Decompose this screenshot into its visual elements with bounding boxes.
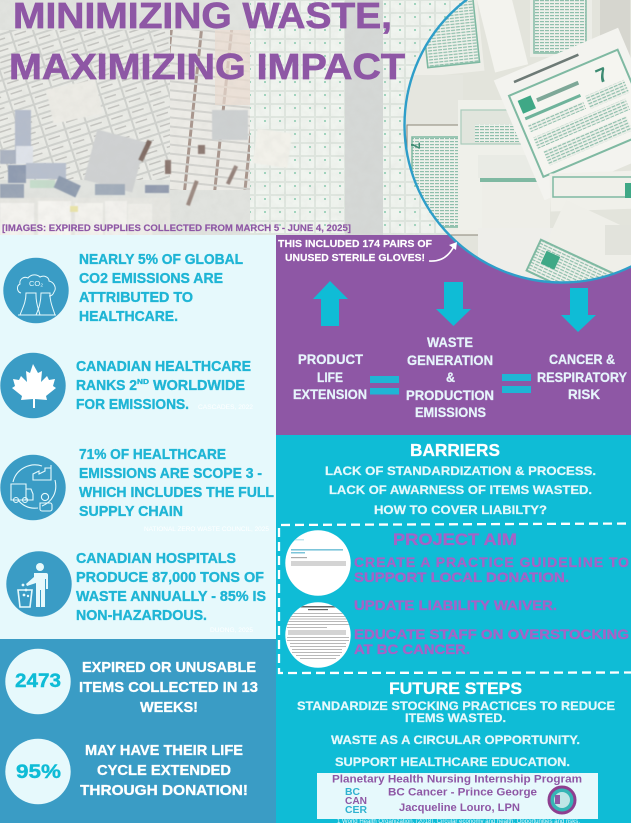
statistic text: CO2 EMISSIONS ARE [79,271,223,287]
list: future steps: WASTE AS A CIRCULAR OPPORTUNITY. [331,733,580,747]
equals sign: right [502,374,531,393]
list: future steps: STANDARDIZE STOCKING PRACTICES TO REDUCE [297,699,615,713]
stat: Canadian ranking [0,353,254,418]
statistic text: EMISSIONS ARE SCOPE 3 - [79,466,262,482]
document thumbnail: liability waiver [285,602,351,668]
statistic text [79,447,274,520]
logo: BC Cancer [345,787,368,816]
stat: scope 3 emissions [0,447,274,533]
label: waste generation and production emissions [406,335,494,420]
number badge [5,739,71,804]
number badge: 95% [16,762,61,783]
label: product life extension: PRODUCT [298,352,364,367]
list: barriers: LACK OF AWARNESS OF ITEMS WASTED. [329,483,592,497]
photo circle: unused sterile gloves: 7 [408,142,423,149]
image caption: [IMAGES: EXPIRED SUPPLIES COLLECTED FROM MARCH 5 - JUNE 4, 2025] [2,222,351,233]
list: project aims: AT BC CANCER. [354,641,470,657]
citation: CASCADES, 2022 [198,405,254,411]
citation: DUONG, 2025 [210,628,254,634]
description: ITEMS COLLECTED IN 13 [79,680,258,696]
citation: NATIONAL ZERO WASTE COUNCIL, 2025 [144,527,270,533]
label: waste generation and production emissions: GENERATION [407,353,493,368]
statistic text: ATTRIBUTED TO [79,290,193,306]
list: barriers [325,464,596,517]
logo: BC Cancer: CAN [345,796,367,807]
statistic text: CANADIAN HEALTHCARE [76,359,251,375]
heading: barriers: BARRIERS [410,440,500,460]
statistic text: RANKS 2 [76,378,137,394]
statistic text: SUPPLY CHAIN [79,504,183,520]
panel: totals (blue) [0,639,276,823]
statistic text: WORLDWIDE [153,378,245,394]
statistic text: ND [137,377,150,386]
callout: sterile gloves: UNUSED STERILE GLOVES! [285,252,425,264]
hero photo: expired supplies [0,0,464,235]
icon: cooling towers with CO2 cloud [3,258,69,323]
icon: maple leaf [0,353,66,418]
list: future steps: SUPPORT HEALTHCARE EDUCATION. [335,755,570,769]
document thumbnail: practice guideline [285,530,351,596]
brown striped syringes [138,140,152,162]
stat: hospital waste [6,551,266,634]
description: CYCLE EXTENDED [97,763,231,779]
white packets bottom [0,198,170,236]
description: WEEKS! [140,700,198,716]
statistic text: WASTE ANNUALLY - 85% IS [76,589,266,605]
statistic text: CANADIAN HOSPITALS [76,551,236,567]
callout: sterile gloves [278,238,433,264]
panel: teal barriers, aim and next steps [276,435,631,823]
list: barriers: HOW TO COVER LIABILTY? [374,503,547,517]
description [80,743,248,799]
number badge: 2473 [15,671,61,692]
description: MAY HAVE THEIR LIFE [85,743,243,759]
label: product life extension: EXTENSION [293,387,367,402]
dark blue boxes lower left [15,110,31,150]
glove packet [494,28,631,182]
description: THROUGH DONATION! [80,783,248,799]
list: project aims: EDUCATE STAFF ON OVERSTOCKING [354,626,629,642]
heading: future steps: FUTURE STEPS [389,679,522,698]
panel: statistics (pale blue) [0,235,276,639]
logo: planetary health badge [549,787,575,813]
statistic text [79,252,243,325]
list: project aims: CREATE A PRACTICE GUIDELINE TO [354,554,629,570]
label: waste generation and production emissions: WASTE [427,335,473,350]
label: waste generation and production emissions: & [446,370,455,385]
heading: project aim: PROJECT AIM [393,530,517,549]
statistic text: WHICH INCLUDES THE FULL [79,485,274,501]
program and author [332,774,582,814]
statistic text: HEALTHCARE. [79,309,178,325]
label: waste generation and production emissions: EMISSIONS [415,405,486,420]
label: cancer and respiratory risk [537,352,627,402]
equals sign: left [370,376,399,394]
description [79,660,258,716]
list: project aims: SUPPORT LOCAL DONATION. [354,569,569,585]
credits panel [317,773,598,819]
stat: 2473 items [5,649,258,716]
statistic text: NON-HAZARDOUS. [76,608,207,624]
statistic text: NEARLY 5% OF GLOBAL [79,252,243,268]
panel: purple waste outcomes [276,235,631,435]
number badge [5,649,71,714]
program and author: Planetary Health Nursing Internship Program [332,774,582,786]
icon: supply chain [0,455,66,520]
list: future steps: ITEMS WASTED. [405,711,506,725]
list: future steps [297,699,615,769]
dashed box: project aim [279,524,631,673]
arrow: down centre [436,282,471,326]
glove packet: 7 [593,64,612,88]
arrow: up [313,281,348,326]
label: product life extension: LIFE [317,370,343,385]
callout: sterile gloves: THIS INCLUDED 174 PAIRS OF [278,238,433,250]
list: project aims [354,554,629,657]
list: barriers: LACK OF STANDARDIZATION & PROCESS. [325,464,596,478]
program and author: BC Cancer - Prince George [388,786,537,798]
stat: global CO2 emissions [3,252,243,325]
label: waste generation and production emissions: PRODUCTION [406,388,494,403]
icon: cooling towers with CO2 cloud: CO₂ [29,279,43,288]
stat: 95 percent [5,739,248,804]
statistic text: PRODUCE 87,000 TONS OF [76,570,264,586]
arrow: down right [561,288,596,332]
label: product life extension [293,352,367,402]
statistic text: FOR EMISSIONS. [76,397,189,413]
arrow: callout to gloves [429,242,457,261]
list: project aims: UPDATE LIABILITY WAIVER. [354,597,557,613]
photo circle: unused sterile gloves [400,0,631,310]
icon: person at trash bin [6,551,72,617]
label: cancer and respiratory risk: RISK [568,387,600,402]
logo: BC Cancer: CER [345,805,368,816]
logo: BC Cancer: BC [345,787,360,798]
program and author: Jacqueline Louro, LPN [399,802,520,814]
description: EXPIRED OR UNUSABLE [82,660,256,676]
title: MAXIMIZING IMPACT [9,46,405,87]
title [9,0,405,87]
label: cancer and respiratory risk: RESPIRATORY [537,370,627,385]
statistic text [76,551,266,624]
statistic text: 71% OF HEALTHCARE [79,447,226,463]
statistic text [76,359,251,413]
label: cancer and respiratory risk: CANCER & [549,352,615,367]
